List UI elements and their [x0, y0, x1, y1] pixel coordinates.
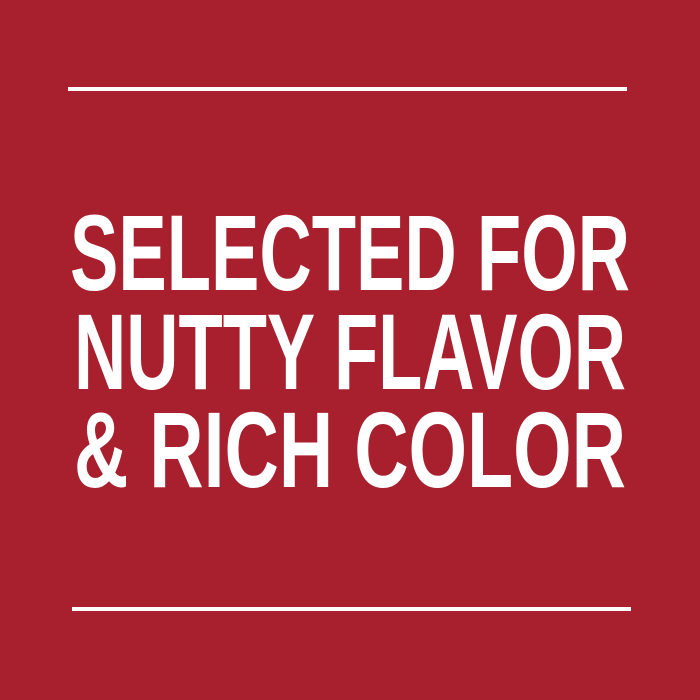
- title: headline text: [70, 192, 630, 510]
